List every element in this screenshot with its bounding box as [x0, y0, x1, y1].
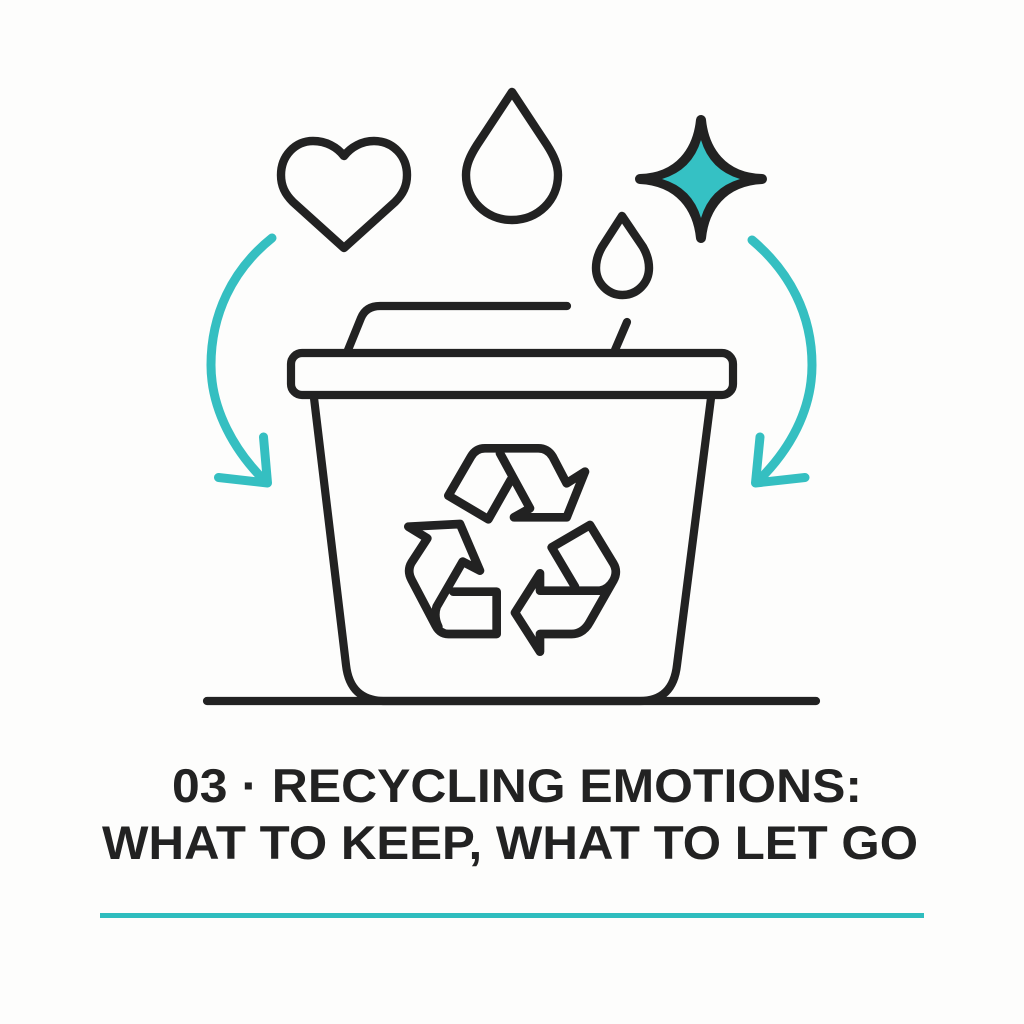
- top arrow: [448, 448, 585, 519]
- title line 2: WHAT TO KEEP, WHAT TO LET GO: [102, 816, 918, 869]
- title: [102, 759, 918, 869]
- arrow: left teal curve: [211, 238, 272, 483]
- icon: recycling symbol: [408, 448, 616, 652]
- title line 1: 03 · RECYCLING EMOTIONS:: [172, 759, 862, 812]
- arrow: right teal curve: [752, 240, 812, 483]
- icon: teal sparkle: [640, 120, 762, 238]
- icon: small drop: [596, 216, 649, 295]
- left arrow: [408, 524, 497, 634]
- icon: recycling bin: [207, 306, 816, 701]
- bin body: [314, 398, 711, 701]
- teal divider: [100, 913, 924, 918]
- bin handle: [348, 306, 627, 350]
- ground line: [207, 697, 816, 705]
- icon: heart: [281, 141, 407, 248]
- icon: large drop: [466, 92, 558, 220]
- right arrow: [515, 525, 616, 652]
- bin lid: [291, 353, 733, 395]
